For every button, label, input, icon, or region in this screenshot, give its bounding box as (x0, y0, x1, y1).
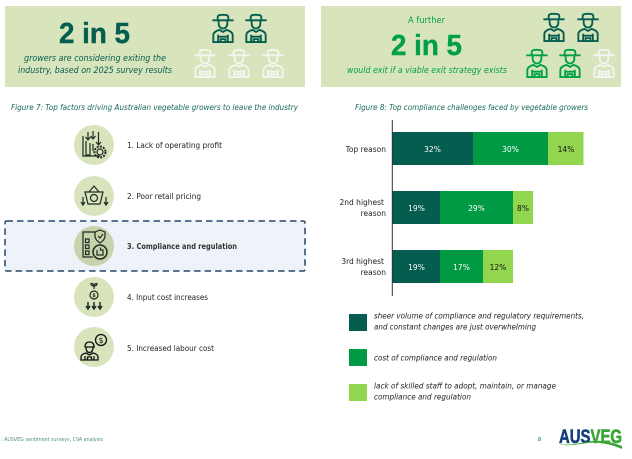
panel: a further 2 in 5 would exit (321, 6, 621, 87)
axis line (391, 120, 393, 296)
legend: sheer volume of compliance and regulatory requirements, (374, 312, 584, 320)
bar: 2nd highest reason: 29% (468, 204, 485, 213)
text: a further: A further (408, 16, 445, 26)
factor 3: compliance and regulation (74, 226, 237, 266)
bar: 2nd highest reason (392, 191, 533, 224)
bar: 3rd highest reason: 19% (408, 263, 425, 272)
factor 1: lack of operating profit (74, 125, 222, 165)
logo: AUSVEG: AUSVEG (559, 427, 622, 448)
label: 4. Input cost increases (127, 293, 208, 302)
heading: figure 8: Figure 8: Top compliance challenges faced by vegetable growers (355, 103, 588, 112)
icons: five farmers, four highlighted (526, 14, 615, 77)
bar: 3rd highest reason: 17% (453, 263, 470, 272)
stat: 2 in 5: 2 in 5 (391, 30, 462, 62)
bar: 2nd highest reason: 8% (517, 204, 529, 213)
legend: compliance and regulation (374, 392, 471, 402)
label: 3. Compliance and regulation (127, 242, 237, 251)
category labels: Top reason (345, 145, 386, 154)
legend (349, 312, 584, 402)
bar: 3rd highest reason (392, 250, 513, 283)
heading: figure 7: Figure 7: Top factors driving Australian vegetable growers to leave the industry (11, 103, 299, 112)
text: growers description: growers are considering exiting the (24, 54, 166, 64)
stat: 2 in 5: 2 in 5 (59, 18, 130, 50)
bar: top reason: 32% (424, 145, 441, 154)
category labels: reason (361, 268, 386, 277)
icons: five farmers, two highlighted (194, 15, 284, 77)
factor 4: input cost increases: $ (92, 293, 96, 299)
icon: falling bars and gear (83, 131, 106, 158)
footer: page number: 8 (538, 437, 542, 443)
label: 1. Lack of operating profit (127, 141, 222, 150)
bar: 3rd highest reason: 12% (490, 263, 506, 272)
panel: 2 in 5 growers considering exiting (5, 6, 305, 87)
bar: top reason (392, 132, 584, 165)
factor 4: input cost increases (74, 277, 208, 317)
highlight box: compliance and regulation (5, 221, 305, 271)
label: 5. Increased labour cost (127, 344, 214, 353)
icon: seedling, dollar and arrows (86, 284, 102, 309)
legend: lack of skilled staff to adopt, maintain, or manage (374, 382, 556, 390)
bar: 2nd highest reason: 19% (408, 204, 425, 213)
category labels: 3rd highest (341, 257, 384, 266)
bar: top reason: 30% (502, 145, 519, 154)
text: exit strategy description: would exit if a viable exit strategy exists (347, 66, 508, 76)
icon: checklist, shield and thumbs up (83, 230, 107, 259)
label: 2. Poor retail pricing (127, 192, 201, 201)
category labels: reason (361, 209, 386, 218)
factor 5: increased labour cost: $ (98, 336, 104, 345)
text: growers description (18, 54, 173, 76)
icon: basket and down arrows (81, 186, 108, 205)
legend: cost of compliance and regulation (374, 354, 497, 362)
chart: compliance challenges stacked bars (340, 120, 584, 296)
factor 2: poor retail pricing (74, 176, 201, 216)
text: growers description: industry, based on 2025 survey results (18, 66, 173, 76)
category labels: 2nd highest (340, 198, 384, 207)
bar: top reason: 14% (558, 145, 574, 154)
footer: source: : AUSVEG sentiment surveys, CVA analysis (1, 437, 103, 443)
factor 5: increased labour cost (74, 327, 214, 367)
category labels (340, 145, 386, 277)
icon: worker with dollar coin (81, 334, 106, 360)
legend: and constant changes are just overwhelming (374, 322, 536, 332)
